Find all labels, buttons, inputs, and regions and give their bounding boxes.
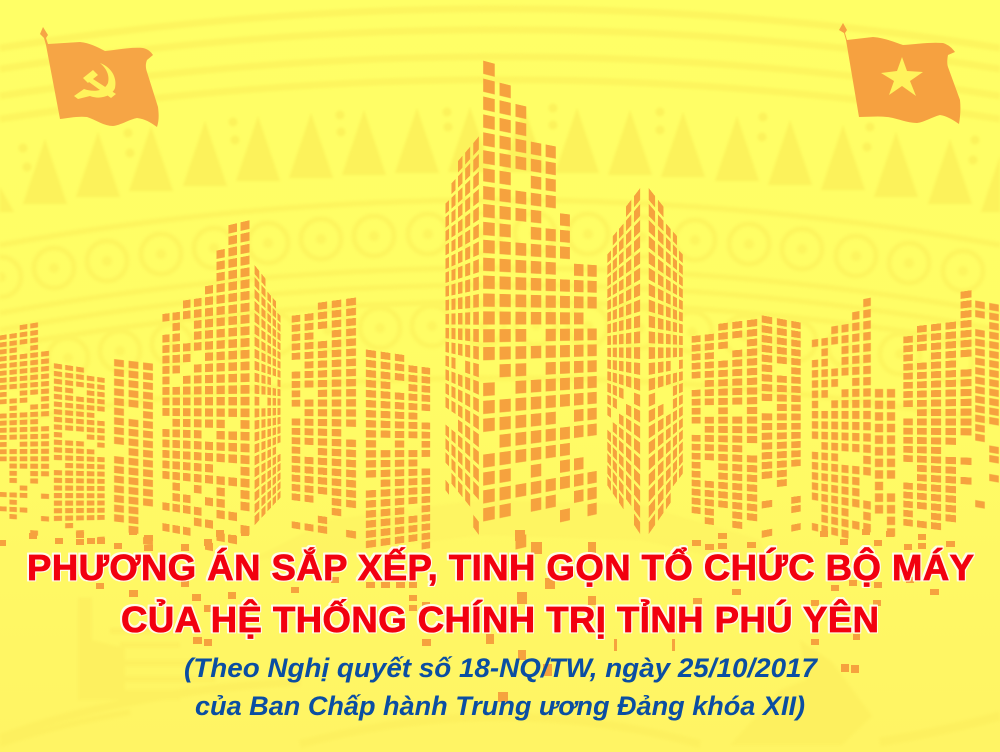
subtitle: (Theo Nghị quyết số 18-NQ/TW, ngày 25/10/2017 (184, 653, 819, 683)
building face: far left, right wall (54, 363, 105, 538)
building: far left block (0, 322, 105, 538)
building: far right block (903, 290, 999, 530)
building: right tower (812, 298, 896, 539)
building: mid block (366, 350, 430, 550)
building face: far right block, right (975, 300, 999, 509)
building: narrow block (114, 359, 153, 545)
building: main tower (446, 60, 597, 550)
building: left tower (162, 220, 280, 552)
building face: second tower, right (648, 188, 683, 534)
building: mid-left block (292, 298, 356, 539)
subtitle (184, 653, 819, 721)
title: CỦA HỆ THỐNG CHÍNH TRỊ TỈNH PHÚ YÊN (121, 598, 879, 640)
building face: mid block (366, 350, 430, 550)
building face: second tower, left (607, 188, 640, 534)
building face: left tower, front (162, 220, 250, 552)
building face: right tower, left (812, 298, 871, 539)
building face: mid-left block (292, 298, 356, 539)
building face: far left, left wall (0, 322, 50, 536)
building: second tower (607, 188, 683, 534)
building face: right-mid block, right (762, 315, 801, 538)
building face: main tower, front (483, 60, 597, 550)
building face: far right block, left (903, 290, 972, 530)
building face: narrow block (114, 359, 153, 545)
building face: right tower, right (874, 388, 896, 537)
subtitle: của Ban Chấp hành Trung ương Đảng khóa XII) (195, 691, 805, 721)
building face: left tower, side (254, 265, 280, 525)
building face: main tower, side (446, 136, 479, 535)
title: PHƯƠNG ÁN SẮP XẾP, TINH GỌN TỔ CHỨC BỘ MÁY (27, 545, 974, 588)
building face: right-mid block, left (692, 319, 758, 529)
title (27, 545, 974, 640)
building: right-mid block (692, 315, 801, 538)
